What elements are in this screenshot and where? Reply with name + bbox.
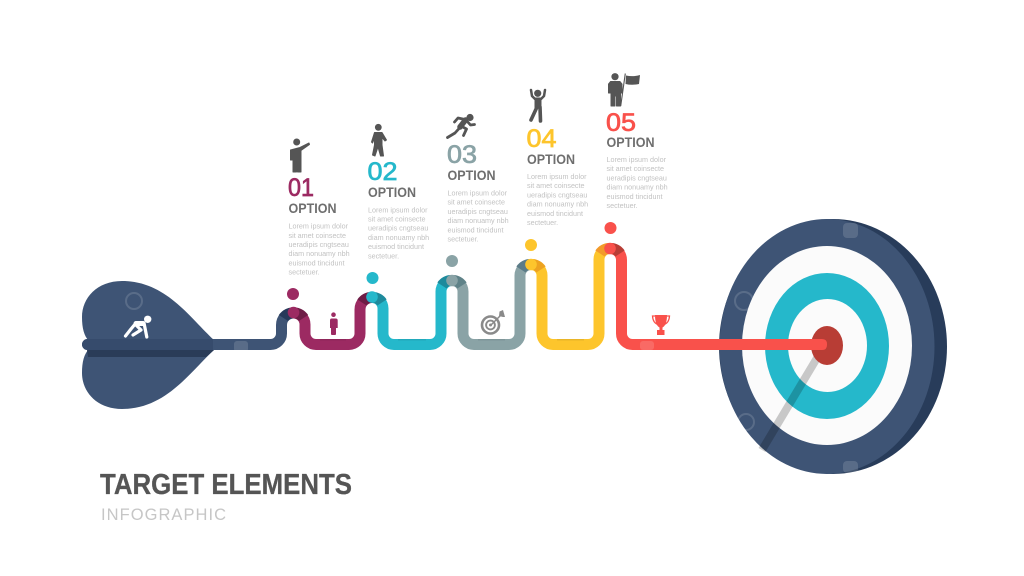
upper fin [82, 281, 214, 341]
option 1 [288, 138, 350, 277]
red path segment [610, 248, 700, 344]
target board [719, 219, 947, 474]
icon: person with flag [608, 73, 640, 106]
text block: sit amet coinsecte [288, 231, 346, 240]
heading: OPTION [448, 167, 496, 183]
text block: sit amet coinsecte [527, 181, 585, 190]
text block: sit amet coinsecte [448, 198, 505, 207]
heading: OPTION [527, 151, 575, 167]
yellow path segment [531, 248, 610, 344]
step dots [287, 222, 616, 300]
title: TARGET ELEMENTS [100, 469, 352, 501]
text block: ueradipis cngtseau [527, 190, 587, 199]
number: 04 [526, 125, 557, 153]
subtitle: INFOGRAPHIC [101, 506, 226, 524]
board side [719, 219, 947, 474]
text block: euismod tincidunt [368, 242, 424, 251]
bullseye [811, 326, 843, 365]
junction overlaps [284, 243, 620, 318]
text block: sectetuer. [527, 218, 558, 227]
text block: euismod tincidunt [448, 225, 503, 234]
teal path segment [372, 280, 452, 344]
junction 5 [600, 243, 620, 254]
text block: sectetuer. [448, 235, 479, 244]
plum path segment [294, 298, 372, 344]
dart shaft to target [695, 339, 827, 350]
text block: diam nonuamy nbh [448, 216, 509, 225]
text block: Lorem ipsum dolor [288, 222, 349, 230]
icon: cheering person [531, 90, 545, 121]
heading: OPTION [288, 200, 336, 216]
number: 02 [368, 158, 398, 186]
text block: euismod tincidunt [288, 258, 344, 268]
fin shadow band [87, 350, 214, 357]
text block: diam nonuamy nbh [288, 249, 350, 258]
icon: crawling runner [126, 316, 151, 337]
arrow shadow [762, 358, 817, 450]
junction 1 [284, 307, 304, 318]
icon: pointing person [290, 138, 310, 172]
option 2 [368, 124, 429, 260]
option 5 [606, 73, 668, 210]
option 4 [526, 90, 588, 227]
number: 05 [606, 109, 636, 137]
shaft inside the fins [82, 339, 213, 350]
text block: Lorem ipsum dolor [527, 172, 587, 181]
text block: sit amet coinsecte [368, 214, 426, 224]
text block: sectetuer. [368, 251, 399, 260]
text block: sectetuer. [288, 268, 320, 277]
junction 2 [362, 291, 382, 303]
grey path segment [452, 264, 531, 344]
icon: small target [482, 310, 505, 334]
board face [720, 219, 934, 474]
option 3 [447, 114, 509, 244]
text block: euismod tincidunt [606, 192, 662, 201]
icon: small standing person [330, 312, 338, 335]
junction 3 [442, 275, 462, 286]
text block: ueradipis cngtseau [288, 240, 349, 249]
icon: walking person [372, 124, 386, 156]
lower fin [82, 349, 214, 409]
text block: Lorem ipsum dolor [368, 205, 428, 214]
icon: trophy [652, 315, 670, 335]
navy path segment [88, 313, 294, 344]
number: 01 [288, 174, 314, 202]
text block: sectetuer. [606, 201, 638, 210]
white ring [742, 246, 912, 445]
path inner shading [320, 339, 584, 341]
dart tail [82, 281, 214, 409]
text block: ueradipis cngtseau [448, 207, 508, 216]
text block: Lorem ipsum dolor [606, 155, 667, 164]
icon: sprinting person [448, 114, 474, 138]
heading: OPTION [368, 184, 416, 200]
watermarks [126, 223, 858, 473]
text block: diam nonuamy nbh [606, 183, 668, 192]
text block: diam nonuamy nbh [527, 200, 588, 209]
number: 03 [447, 141, 477, 169]
heading: OPTION [606, 134, 654, 150]
text block: sit amet coinsecte [606, 164, 664, 173]
inner white [788, 299, 867, 392]
teal ring [765, 273, 889, 419]
text block: Lorem ipsum dolor [448, 188, 508, 198]
text block: ueradipis cngtseau [368, 224, 428, 233]
text block: diam nonuamy nbh [368, 233, 429, 242]
text block: euismod tincidunt [527, 209, 583, 218]
junction 4 [521, 259, 541, 270]
text block: ueradipis cngtseau [606, 173, 667, 182]
